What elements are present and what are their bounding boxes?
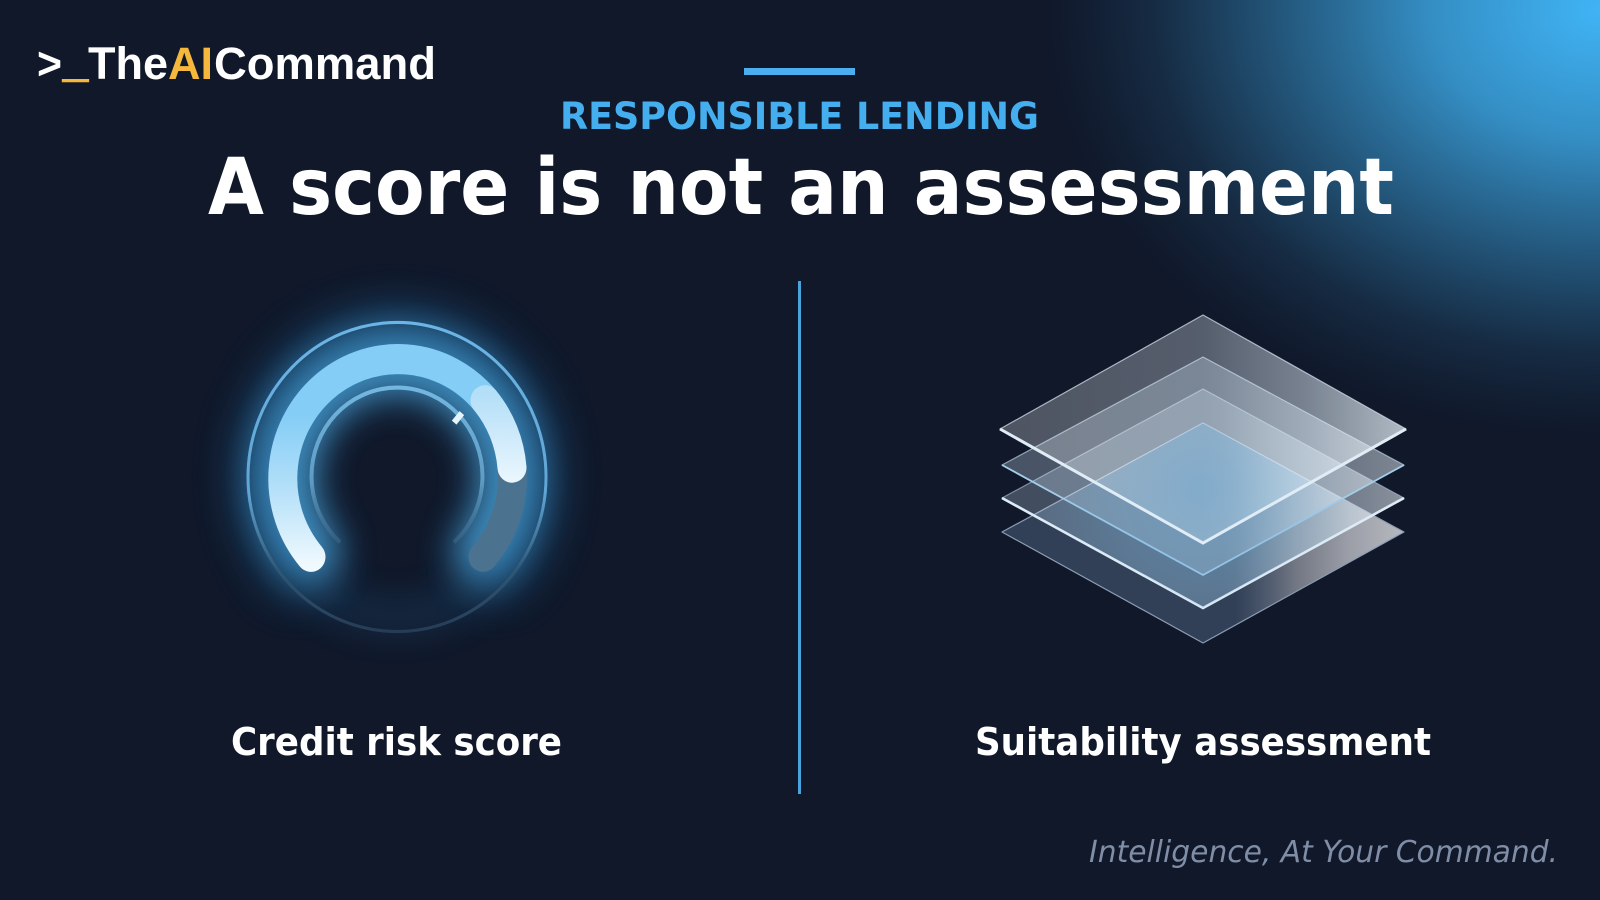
dial inner ring <box>312 388 482 542</box>
layer 2 <box>1002 357 1404 575</box>
divider line <box>798 281 801 794</box>
layer 4 <box>1002 423 1404 643</box>
layer 3 <box>1002 389 1404 608</box>
layer 1 bright edge <box>1000 429 1406 543</box>
icon: credit score dial <box>248 322 546 632</box>
dial wide glow <box>265 340 529 568</box>
dial faint base glow <box>262 337 532 617</box>
logo: > <box>37 38 62 89</box>
logo <box>37 35 436 89</box>
layer 3 lower edge <box>1002 498 1404 608</box>
layer core tint <box>1036 423 1370 608</box>
tagline: Intelligence, At Your Command. <box>1089 835 1558 870</box>
logo: AI <box>168 38 213 89</box>
layer 1 <box>1000 315 1406 543</box>
label: suitability assessment: Suitability assessment <box>975 720 1431 764</box>
logo: The <box>88 38 168 89</box>
dial end segment <box>485 400 512 468</box>
dial tight glow <box>289 367 505 552</box>
corner glow <box>1030 0 1600 460</box>
dial remaining arc <box>483 468 512 557</box>
label: credit risk score: Credit risk score <box>231 720 562 764</box>
logo: Command <box>214 38 436 89</box>
dial main arc <box>283 359 485 557</box>
title: A score is not an assessment <box>208 143 1394 233</box>
logo: _ <box>62 35 89 86</box>
icon: stacked layers <box>1000 315 1406 643</box>
layer 2 lower edge <box>1002 465 1404 575</box>
dial outer ring <box>248 322 546 632</box>
accent bar <box>744 68 855 75</box>
eyebrow heading: RESPONSIBLE LENDING <box>560 95 1039 138</box>
dial tick <box>452 411 464 425</box>
